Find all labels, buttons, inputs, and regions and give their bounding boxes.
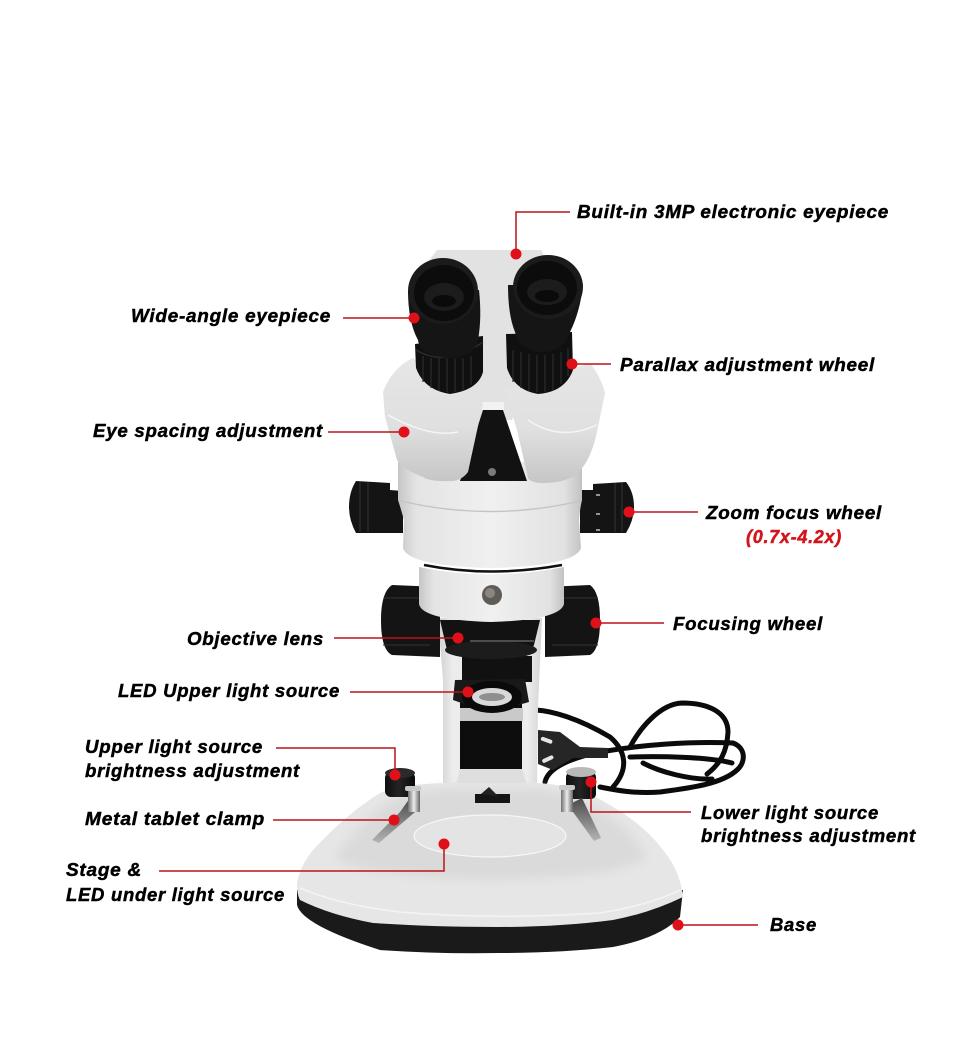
zoom body [398, 462, 582, 572]
label: upper brightness: brightness adjustment [85, 761, 300, 781]
objective lens [440, 620, 540, 659]
leader: upper brightness [276, 748, 400, 780]
stage glass plate [414, 815, 566, 857]
power cord and plug [536, 703, 743, 793]
leader: wide-angle eyepiece [343, 312, 420, 324]
base [297, 783, 683, 953]
label: upper brightness [85, 737, 300, 781]
leader: base [672, 920, 758, 930]
power switch [475, 787, 510, 803]
label: focusing wheel: Focusing wheel [673, 614, 823, 634]
label: lower brightness [701, 803, 916, 846]
label: base: Base [770, 915, 817, 935]
label: upper brightness: Upper light source [85, 737, 263, 757]
leader: tablet clamp [273, 814, 400, 826]
label: stage: Stage & [66, 860, 142, 880]
label: parallax wheel: Parallax adjustment wheel [620, 355, 875, 375]
leader: focusing wheel [590, 618, 664, 628]
leader: parallax wheel [566, 358, 611, 370]
label: lower brightness: Lower light source [701, 803, 879, 823]
callout leaders and dots [159, 212, 758, 930]
LED upper light [453, 679, 529, 713]
pillar [438, 618, 542, 785]
label: zoom focus wheel: Zoom focus wheel [705, 503, 882, 523]
focusing wheels [381, 585, 600, 657]
leader: stage [159, 838, 450, 871]
label: wide-angle eyepiece: Wide-angle eyepiece [131, 306, 331, 326]
label: lower brightness: brightness adjustment [701, 826, 916, 846]
head back block [428, 250, 548, 420]
label: zoom range: (0.7x-4.2x) [746, 527, 842, 547]
leader: lower brightness [586, 776, 691, 812]
leader: built-in eyepiece [510, 212, 570, 260]
wide-angle eyepieces [408, 255, 583, 394]
label: stage: LED under light source [66, 885, 285, 905]
leader: zoom focus wheel [624, 506, 698, 518]
leader: eye spacing [328, 426, 410, 438]
label: LED upper light: LED Upper light source [118, 681, 340, 701]
zoom focus wheels [349, 481, 634, 533]
label: stage [66, 860, 285, 905]
black center plate [460, 410, 527, 481]
focus housing [419, 567, 564, 622]
left eyepiece [408, 258, 483, 394]
microscope [297, 250, 743, 953]
right eyepiece [506, 255, 583, 394]
label: objective lens: Objective lens [187, 629, 324, 649]
metal tablet clamps [372, 785, 601, 843]
label: eye spacing: Eye spacing adjustment [93, 421, 323, 441]
brightness knobs [385, 767, 596, 799]
eye spacing housing [383, 358, 605, 483]
leader: LED upper light [350, 686, 474, 698]
leader: objective lens [334, 632, 464, 644]
label: tablet clamp: Metal tablet clamp [85, 809, 265, 829]
label: built-in eyepiece: Built-in 3MP electronic eyepiece [577, 202, 889, 222]
